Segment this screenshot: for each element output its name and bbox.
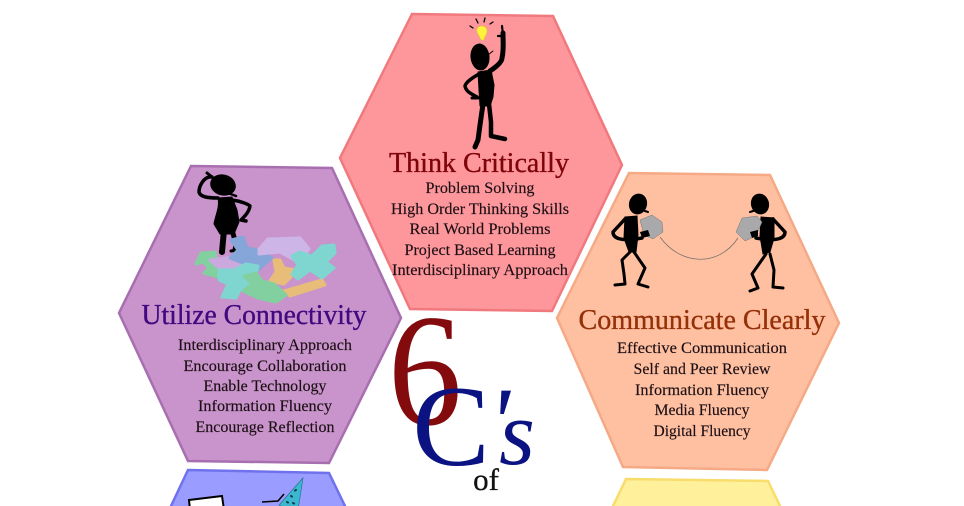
text: think critically list: Interdisciplinary Approach bbox=[392, 262, 568, 279]
text: think critically list: Problem Solving bbox=[426, 180, 535, 197]
panel: think critically bbox=[340, 14, 622, 311]
text: think critically list bbox=[391, 180, 569, 279]
icon: paper and wizard hat bbox=[189, 478, 303, 506]
panel: lower left hexagon (cropped) bbox=[171, 470, 345, 506]
heading: utilize connectivity: Utilize Connectivity bbox=[142, 300, 366, 331]
text: utilize connectivity list: Interdisciplinary Approach bbox=[178, 337, 352, 354]
panel: utilize connectivity bbox=[119, 166, 401, 463]
text: utilize connectivity list: Encourage Collaboration bbox=[184, 358, 347, 375]
text: utilize connectivity list: Information Fluency bbox=[198, 398, 332, 415]
text: communicate clearly list: Effective Communication bbox=[617, 340, 787, 357]
title numeral 6: 6 bbox=[388, 281, 462, 459]
title letter C: C bbox=[412, 363, 490, 491]
text: communicate clearly list bbox=[617, 340, 787, 440]
text: utilize connectivity list: Encourage Reflection bbox=[196, 419, 335, 436]
text: utilize connectivity list: Enable Technology bbox=[204, 378, 327, 395]
panel: communicate clearly bbox=[557, 173, 839, 470]
heading: communicate clearly: Communicate Clearly bbox=[578, 305, 826, 336]
icon: puzzled figure on puzzle pieces bbox=[196, 171, 335, 302]
title apostrophe: ' bbox=[488, 367, 511, 478]
heading: think critically: Think Critically bbox=[389, 148, 569, 179]
text: communicate clearly list: Information Fluency bbox=[635, 382, 769, 399]
text: think critically list: Project Based Learning bbox=[404, 242, 556, 259]
text: think critically list: Real World Problems bbox=[410, 221, 550, 238]
title letter s: s bbox=[499, 382, 535, 484]
icon: thinker with light bulb bbox=[465, 18, 505, 147]
text: communicate clearly list: Digital Fluency bbox=[654, 423, 751, 440]
text: communicate clearly list: Self and Peer Review bbox=[634, 361, 771, 378]
text: think critically list: High Order Thinking Skills bbox=[391, 201, 569, 218]
text: communicate clearly list: Media Fluency bbox=[654, 402, 750, 419]
icon: two figures with tin can phone bbox=[613, 192, 785, 291]
panel: lower right hexagon (cropped) bbox=[612, 479, 780, 506]
title word of: of bbox=[473, 462, 500, 497]
puzzle pieces bbox=[196, 237, 335, 302]
title: 6 C's of bbox=[388, 281, 535, 497]
text: utilize connectivity list bbox=[178, 337, 352, 436]
